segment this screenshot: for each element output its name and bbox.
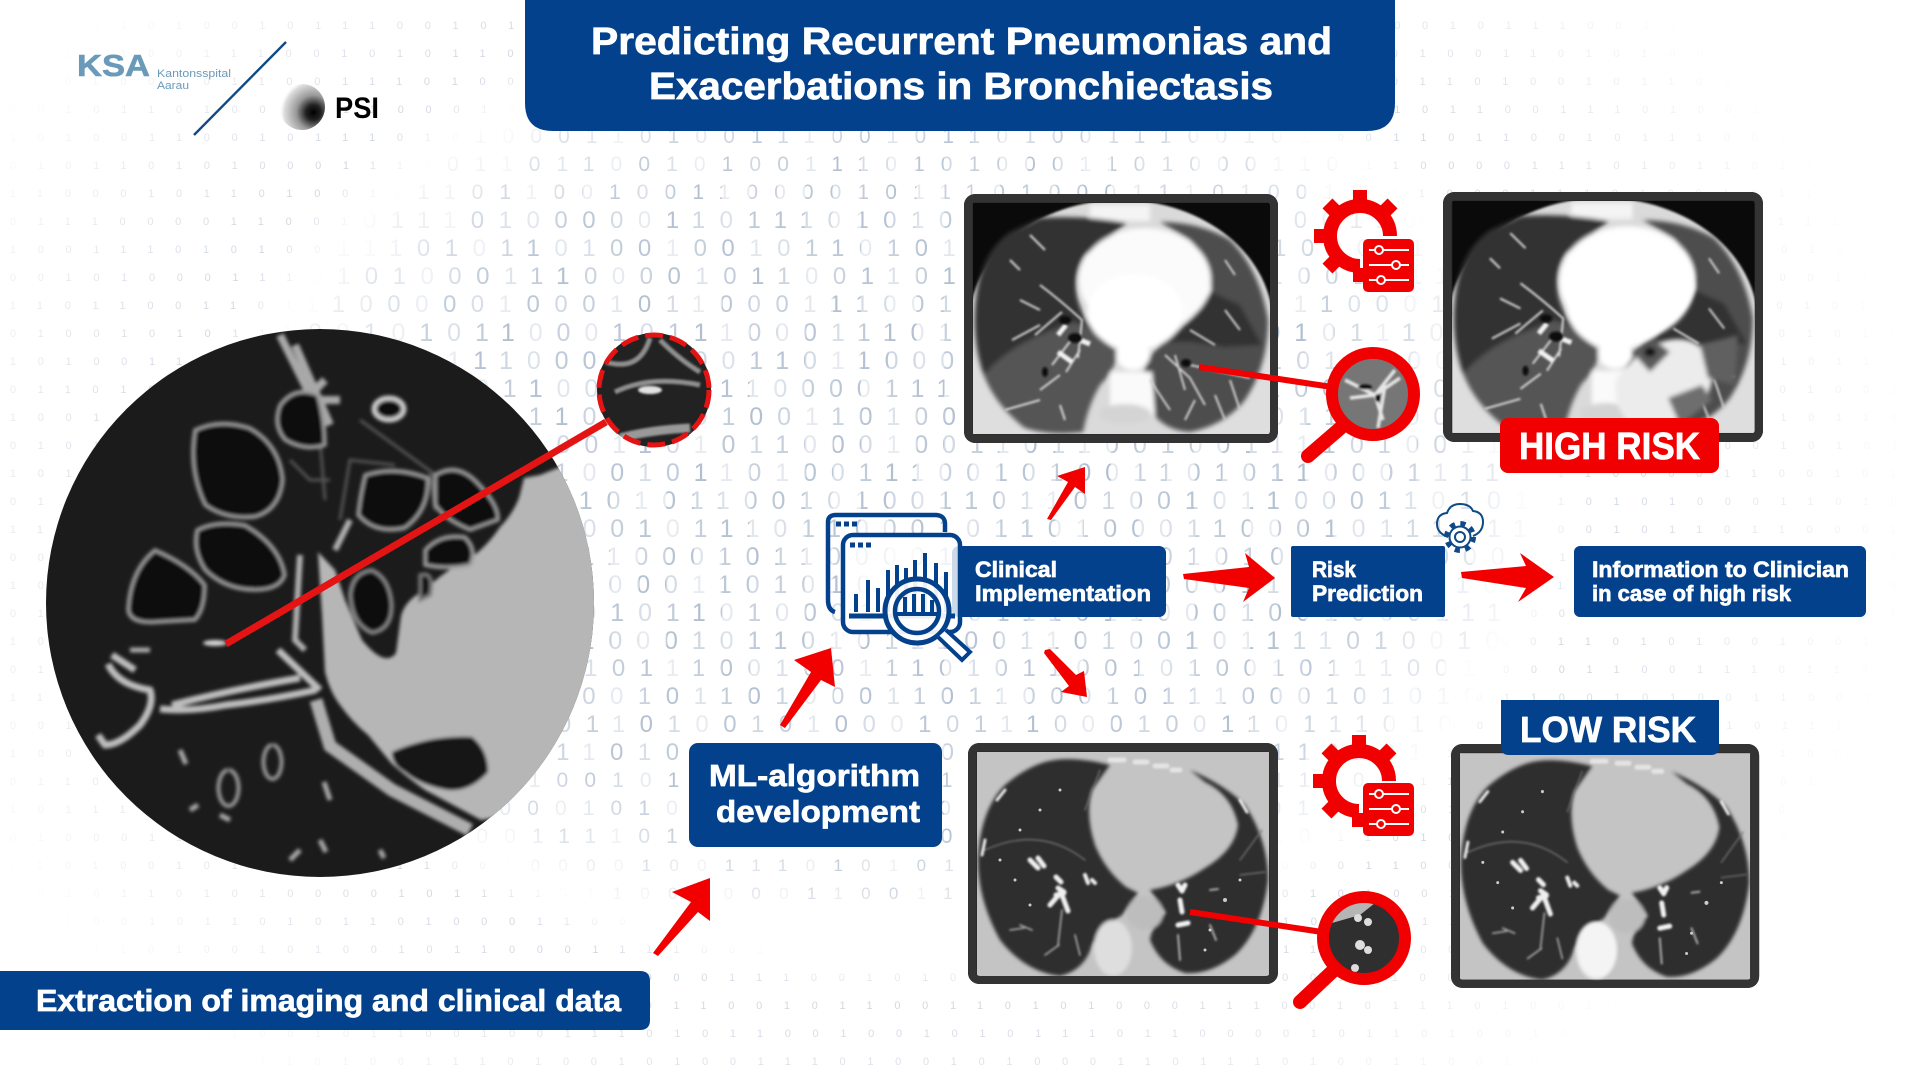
label: ML-algorithm development [689,743,942,847]
background: outer small binary digits: 110010100111010110001001011101100010110100011000101110110010110110001 [10,524,1918,536]
CT scan: baseline, bottom [968,743,1278,984]
background: outer small binary digits: 001011010110100111010010100111010010100011011101001100101101010010111 [10,1056,1919,1068]
icon: red magnifier with bronchus detail, top [1308,353,1414,456]
background: central large binary digits: 010010110001100100011101110010011101011001010010111001000110011101100 [6,655,1901,682]
CT scan: high risk with consolidation [1443,192,1763,449]
logo: KSA Kantonsspital Aarau: Aarau [157,80,189,92]
background: central large binary digits: 101110011001010111000101001101101100110110100101010011001011101100100 [7,797,1902,820]
arrow: down to low-risk scan [1044,649,1087,697]
label: clinical implementation [952,546,1166,617]
label: risk prediction [1291,546,1445,617]
pointer line: detail to inset [226,422,606,644]
background: outer small binary digits: 001010001110101000111000010110011010001011101110010110001100110100111 [10,272,1917,284]
title banner: Exacerbations in Bronchiectasis [649,66,1273,108]
background: outer small binary digits: 010111001001011010010011010110001001101100100111101001100011010010101 [10,440,1920,452]
background: outer small binary digits: 101001100101110101000110100111001011010011100101001101100101110010101 [10,132,1919,144]
arrow: up to high-risk scan [1047,467,1085,520]
logo: KSA Kantonsspital Aarau: Kantonsspital [157,68,231,80]
background: central large binary digits: 010001110100101000011110110100011001001100010110110101100100101001110 [7,825,1904,848]
arrow: ML to clinical implementation [780,648,835,728]
background: central large binary digits: 001011100100110010100110100101000101110001001101110100001100101011101 [6,711,1906,738]
label: ML-algorithm development: development [716,794,920,829]
background: outer small binary digits: 010010110001100100011101110010011101011001010010111001000110011101100 [10,664,1917,676]
CT scan: baseline, top [964,194,1278,450]
background: outer small binary digits: 010001110100101000011110110100011001001100010110110101100100101001110 [10,832,1919,844]
background: central large binary digits: 101101001110011011000100010110101110011010010111101001001101010010011 [6,627,1898,655]
background: central large binary digits: 001011010100001011110110010001100111001101000101010010110010110100110 [8,884,1908,903]
background: outer small binary digits: 100110100011001101011101001100101101001110100011010110010110011010001 [10,748,1919,760]
icon: analytics windows with magnifier [828,515,970,660]
inset: dashed red circle [597,333,711,447]
background: outer small binary digits: 001011010010110001011100101001101011100100110100101011001110100101100 [10,104,1920,116]
background: outer small binary digits: 110001011010011110110010011000010111010001110100101100011101001011000 [10,188,1917,200]
badge: high risk [1500,418,1719,473]
label: risk prediction: Risk [1312,557,1357,582]
CT scan: low risk [1451,744,1759,988]
background: central large binary digits: 100110100011001101011101001100101101001110100011010110010110011010001 [6,739,1905,766]
background: outer small binary digits: 011100101001100110110100110010110011010100011100101110100110101100010 [10,1000,1918,1012]
logo: KSA Kantonsspital Aarau [77,48,231,92]
badge: low risk [1501,700,1719,755]
icon: red magnifier with bronchus detail, bottom [1300,895,1405,1002]
title banner: Predicting Recurrent Pneumonias and [591,21,1332,63]
pointer line: bottom scan to magnifier [1190,912,1322,932]
logo divider: diagonal line [194,42,286,135]
background: central large binary digits: 100111010100111010110100100101101010011011001010001101011011000101001 [6,235,1908,262]
background: central large binary digits [310,128,1522,899]
arrow: clinical implementation to risk prediction [1183,553,1275,602]
CT zoom: large circular lung detail [46,329,610,877]
background: central large binary digits: 001101110010100110101110001011000010101101010100110100011001011001110 [6,543,1900,571]
background: outer small binary digits: 010110101000111001101100101001110101000110100011011000011101011010010 [10,160,1919,172]
label: clinical implementation: Implementation [975,581,1151,606]
background: central large binary digits: 010110101000111001101100101001110101000110100011011000011101011010010 [7,153,1904,176]
background: central large binary digits: 011010010011001010110011011100001110110100000110010100011101001101001 [6,375,1900,403]
background: outer small binary digits: 101001011010110100011000110100011001000110110110100110011101001011001 [10,916,1920,928]
background: outer small binary digits: 110100010111010111010001011010001101100010111000101010110010100110010 [10,692,1920,704]
background: central large binary digits: 011001001110110001010010110011000110010100011011100110100100110001011 [7,769,1904,792]
icon: gear with sliders, bottom [1313,735,1414,836]
background: outer small binary digits: 011011001011100100011101011001010011011010010110001101011010100011010 [10,496,1919,508]
background: central large binary digits: 011100001100101110100000110111010100101000111110011000110101011011101 [6,207,1898,234]
label: ML-algorithm development: ML-algorithm [709,758,920,793]
background: central large binary digits: 010111001001011010010011010110001001101100100111101001100011010010101 [6,431,1902,459]
background: outer small binary digits: 011001001110110001010010110011000110010100011011100110100100110001011 [10,776,1919,788]
background: central large binary digits: 001011010010110001011100101001101011100100110100101011001110100101100 [8,100,1908,119]
background: central large binary digits: 010010101110010101100010111000111011010001110001011100101101011001011 [6,319,1897,347]
icon: cloud with gear [1437,504,1483,550]
background: outer small binary digits: 011100001100101110100000110111010100101000111110011000110101011011101 [10,216,1915,228]
label: information to clinician [1574,546,1866,617]
background: central large binary digits: 110100101011011100100001001110101010001110101100011001011010011010001 [8,856,1908,875]
icon: gear with sliders, top [1314,190,1414,292]
background: outer small binary digits: 101001101011010011100000100110110001000011100110100001011000111010110 [10,356,1919,368]
background: central large binary digits: 100111000101011001110100011010101110100110000111010111001010010011010 [6,571,1898,599]
arrow: risk prediction to clinician [1461,553,1554,602]
background: outer small binary digits: 110100101100111010010110010111001101001011001011100110100101100101110 [10,76,1917,88]
background: outer small binary digits: 001101110010100110101110001011000010101101010100110100011001011001110 [10,552,1919,564]
logo: PSI [279,84,379,130]
background: central large binary digits: 110110011011100000100010110001110011001111000101100011000110011101010 [6,291,1898,318]
background: outer small binary digits: 110110011011100000100010110001110011001111000101100011000110011101010 [10,300,1915,312]
badge: high risk: HIGH RISK [1519,426,1701,468]
background: central large binary digits: 110100010111010111010001011010001101100010111000101010110010100110010 [6,683,1906,710]
background: outer small binary digits: 010010101110010101100010111000111011010001110001011100101101011001011 [10,328,1917,340]
background: outer small binary digits: 100111000101011001110100011010101110100110000111010111001010010011010 [10,580,1918,592]
badge: low risk: LOW RISK [1520,709,1696,750]
background: outer small binary digits: 101101001110011011000100010110101110011010010111101001001101010010011 [10,636,1918,648]
background: central large binary digits: 101001101011010011100000100110110001000011100110100001011000111010110 [6,347,1900,375]
label: extraction of imaging and clinical data [0,971,650,1030]
background: central large binary digits: 101000110110010100111001011010011100101001101011000111101100001100101 [6,459,1898,487]
background: central large binary digits: 100101110100001010111010001001101001100101110001110001100101101010110 [6,403,1900,431]
background: outer small binary digits: 001011100100110010100110100101000101110001001101110100001100101011101 [10,720,1920,732]
label: information to clinician: in case of high risk [1592,581,1792,606]
background: central large binary digits: 101001100101110101000110100111001011010011100101001101100101110010101 [7,125,1904,148]
background: outer small binary digits: 010110100101001011000111100101101110100101001011011000101011001100100 [10,944,1920,956]
logo: PSI: PSI [335,92,379,125]
label: extraction of imaging and clinical data: Extraction of imaging and clinical data [36,983,622,1018]
background: outer small binary digits: 001011010100001011110110010001100111001101000101010010110010110100110 [10,888,1920,900]
background: outer small binary digits: 011000110010100111001010110100011000111011000100100011100111010110101 [10,608,1918,620]
background: outer small binary digits: 100101110100001010111010001001101001100101110001110001100101101010110 [10,412,1919,424]
background: outer small binary digits: 101000110110010100111001011010011100101001101011000111101100001100101 [10,468,1918,480]
background: outer small binary digits: 100101101001011001001110101100100101011101100001011010010011010110100 [10,1028,1920,1040]
arrow: extraction to ML [653,878,710,956]
background: central large binary digits: 110001011010011110110010011000010111010001110100101100011101001011000 [7,181,1901,204]
background: outer small binary digits: 100110100101110010100110101001011100101001101011010010111001010011010 [10,20,1920,32]
background: central large binary digits: 011000110010100111001010110100011000111011000100100011100111010110101 [6,599,1898,627]
label: risk prediction: Prediction [1312,581,1423,606]
background: central large binary digits: 011011001011100100011101011001010011011010010110001101011010100011010 [6,487,1900,515]
background: outer small binary digits: 100111010100111010110100100101101010011011001010001101011011000101001 [10,244,1920,256]
label: clinical implementation: Clinical [975,557,1057,582]
background: central large binary digits: 110010100111010110001001011101100010110100011000101110110010110110001 [6,515,1898,543]
background: outer small binary digits: 101110011001010111000101001101101100110110100101010011001011101100100 [10,804,1918,816]
pointer line: top scan to magnifier [1199,367,1332,387]
background: outer small binary digits: 110010110011101001011010001110010100101100110100111001011000101001011 [10,972,1919,984]
background: outer small binary digits: 110100101011011100100001001110101010001110101100011001011010011010001 [10,860,1920,872]
background: central large binary digits: 001010001110101000111000010110011010001011101110010110001100110100111 [6,263,1901,290]
logo: KSA Kantonsspital Aarau: KSA [77,48,150,83]
background: outer small binary digits: 011010010011001010110011011100001110110100000110010100011101001101001 [10,384,1919,396]
label: information to clinician: Information to Clinician [1592,557,1849,582]
background: outer small binary digits: 011010011100101011001101001011100101100110100101110100110101001101001 [10,48,1919,60]
title banner [525,0,1395,131]
